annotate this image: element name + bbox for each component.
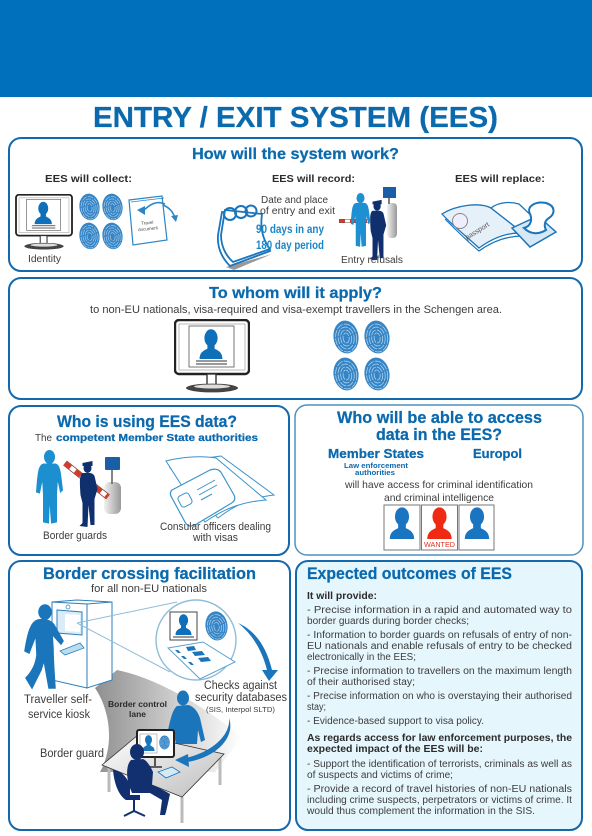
outcomes: law enforcement impact: - Provide a record of travel histories of non-EU nationals bbox=[307, 784, 572, 795]
border guards label: Border guards bbox=[43, 530, 107, 542]
applicability text: to non-EU nationals, visa-required and visa-exempt travellers in the Schengen area. bbox=[90, 304, 502, 316]
outcomes: it will provide: - Precise information to travellers on the maximum length bbox=[307, 666, 572, 677]
seated border guard bbox=[113, 744, 170, 816]
panel: border crossing facilitation bbox=[9, 561, 290, 830]
icon: self-service kiosk bbox=[52, 600, 112, 688]
subheading: collect: EES will collect: bbox=[45, 174, 132, 185]
consular officers label: Consular officers dealing bbox=[160, 521, 271, 533]
top blue band bbox=[0, 0, 592, 97]
icon: passport and stamp: passport bbox=[464, 222, 491, 242]
record text: 180 day period bbox=[256, 238, 324, 252]
outcomes: it will provide: It will provide: bbox=[307, 591, 377, 602]
icon: identity monitor bbox=[16, 195, 72, 250]
access purpose text: will have access for criminal identification bbox=[344, 479, 533, 491]
record text: of entry and exit bbox=[260, 206, 335, 217]
member states: authorities bbox=[355, 470, 395, 477]
border control lane floor bbox=[95, 670, 242, 772]
lane label bbox=[108, 700, 167, 719]
icon: travel document: Travel bbox=[141, 220, 154, 226]
checks label bbox=[195, 680, 287, 714]
outcomes: it will provide: electronically in the EES; bbox=[307, 652, 416, 663]
outcomes: it will provide: EU nationals and enable refusals of entry to be checked bbox=[307, 641, 572, 652]
heading: how will the system work: How will the system work? bbox=[192, 146, 399, 163]
heading: access: Who will be able to access bbox=[337, 408, 542, 427]
icon: traveller, guard and barrier bbox=[36, 450, 121, 527]
heading: to whom: To whom will it apply? bbox=[209, 285, 382, 302]
subheading: record: EES will record: bbox=[272, 174, 355, 185]
panel: how will the system work bbox=[9, 138, 582, 271]
heading: who is using: Who is using EES data? bbox=[57, 412, 237, 431]
panel: expected outcomes of EES bbox=[296, 561, 582, 830]
record text: 90 days in any bbox=[256, 222, 324, 236]
traveller label bbox=[24, 694, 92, 721]
subheading: non-EU nationals: for all non-EU nationals bbox=[91, 583, 208, 595]
europol: Europol bbox=[473, 446, 522, 461]
authorities subheading: The bbox=[35, 432, 52, 444]
outcomes: it will provide: - Information to border guards on refusals of entry of non- bbox=[307, 630, 572, 641]
authorities subheading: competent Member State authorities bbox=[56, 432, 258, 444]
record text: Date and place bbox=[261, 195, 328, 206]
heading: expected outcomes: Expected outcomes of EES bbox=[307, 564, 512, 583]
outcomes: law enforcement impact: As regards access for law enforcement purposes, the bbox=[307, 733, 572, 744]
icon: passport and stamp bbox=[442, 203, 556, 251]
heading: border crossing: Border crossing facilitation bbox=[43, 565, 256, 583]
heading: access: data in the EES? bbox=[376, 425, 502, 444]
identity label: Identity bbox=[28, 254, 61, 265]
outcomes: it will provide: - Precise information in a rapid and automated way to bbox=[307, 605, 572, 616]
icon: border barrier with traveller and guard bbox=[339, 187, 397, 260]
panel: to whom will it apply bbox=[9, 278, 582, 399]
entry refusals label: Entry refusals bbox=[341, 255, 403, 266]
consular officers label: with visas bbox=[192, 532, 238, 544]
zoom lines and magnified circle bbox=[77, 600, 236, 680]
icon: suspect cards bbox=[384, 505, 494, 550]
panel: who is using EES data bbox=[9, 406, 289, 555]
title: ENTRY / EXIT SYSTEM (EES) bbox=[93, 102, 498, 134]
outcomes: it will provide: border guards during border checks; bbox=[307, 616, 469, 627]
outcomes: law enforcement impact bbox=[306, 733, 572, 817]
record text bbox=[256, 195, 335, 252]
checks label: Checks against bbox=[204, 680, 278, 692]
outcomes: law enforcement impact: would thus complement the information in the SIS. bbox=[306, 806, 535, 817]
outcomes: law enforcement impact: including crime suspects, perpetrators or victims of crime. It bbox=[307, 795, 572, 806]
traveller at desk bbox=[168, 690, 205, 744]
member states bbox=[328, 446, 424, 477]
icon: travel document bbox=[129, 196, 178, 245]
outcomes: law enforcement impact: - Support the identification of terrorists, criminals as well as bbox=[307, 759, 572, 770]
lane label: Border control bbox=[108, 700, 167, 709]
border guard label: Border guard bbox=[40, 748, 104, 760]
icon: suspect cards: WANTED bbox=[424, 540, 456, 549]
icon: travel document: document bbox=[138, 225, 159, 232]
outcomes: it will provide: stay; bbox=[307, 702, 326, 713]
traveller label: service kiosk bbox=[28, 709, 90, 721]
access purpose text bbox=[344, 479, 533, 504]
outcomes: law enforcement impact: of suspects and victims of crime; bbox=[307, 770, 453, 781]
outcomes: it will provide: - Evidence-based support to visa policy. bbox=[307, 716, 484, 727]
icon: visa papers and card bbox=[166, 456, 274, 526]
desk with monitor bbox=[102, 730, 224, 823]
outcomes: it will provide: of their authorised stay; bbox=[307, 677, 415, 688]
lane label: lane bbox=[129, 710, 147, 719]
access purpose text: and criminal intelligence bbox=[384, 492, 494, 504]
member states: Law enforcement bbox=[344, 463, 409, 470]
heading: access bbox=[337, 408, 542, 444]
outcomes: it will provide: - Precise information on who is overstaying their authorised bbox=[307, 691, 572, 702]
checks label: security databases bbox=[195, 692, 287, 704]
icon: monitor with portrait bbox=[175, 320, 249, 392]
consular officers label bbox=[160, 521, 271, 544]
icon: walking traveller bbox=[25, 605, 63, 688]
outcomes: law enforcement impact: expected impact of the EES will be: bbox=[307, 744, 483, 755]
outcomes: it will provide bbox=[307, 591, 572, 727]
curved arrow to security databases bbox=[238, 623, 278, 681]
checks label: (SIS, Interpol SLTD) bbox=[206, 705, 276, 714]
panel: who will be able to access data bbox=[295, 405, 583, 555]
icon: four fingerprints bbox=[331, 319, 392, 392]
traveller label: Traveller self- bbox=[24, 694, 92, 706]
member states: Member States bbox=[328, 446, 424, 461]
subheading: replace: EES will replace: bbox=[455, 174, 545, 185]
icon: calendar bbox=[218, 206, 272, 270]
arrow to border guard screen bbox=[175, 718, 230, 767]
icon: fingerprints bbox=[78, 192, 124, 251]
